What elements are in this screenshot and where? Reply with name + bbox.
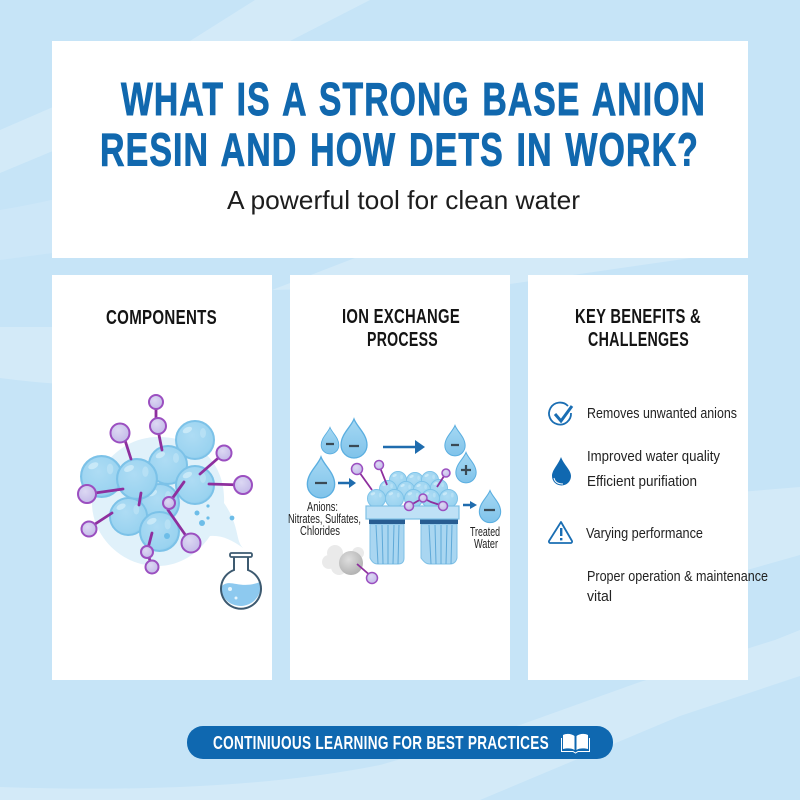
list item: vital: [587, 588, 612, 605]
list item: Proper operation & maintenance: [587, 568, 768, 585]
heading: benefits: KEY BENEFITS &: [575, 305, 701, 328]
icon: warning: [549, 522, 572, 543]
panel: key benefits and challenges: [528, 275, 768, 680]
heading: benefits: CHALLENGES: [588, 328, 689, 351]
panel: ion exchange process: [288, 275, 510, 680]
label: anions: Nitrates, Sulfates,: [288, 512, 361, 526]
molecule illustration: [78, 395, 252, 574]
list item: Efficient purifiation: [587, 473, 697, 490]
heading: ion exchange process: ION EXCHANGE: [342, 305, 460, 328]
list item: [587, 568, 768, 605]
label: treated water: Treated: [470, 525, 500, 539]
heading: ion exchange process: PROCESS: [367, 328, 438, 351]
label: treated water: Water: [474, 537, 498, 551]
label: anions: Chlorides: [300, 524, 340, 538]
filter with resin beads: [352, 460, 459, 564]
list item: Improved water quality: [587, 448, 720, 465]
label: treated water: [470, 525, 500, 551]
icon: drop: [552, 457, 571, 486]
icon: book: [562, 734, 590, 753]
arrows: [338, 440, 477, 509]
list item: Removes unwanted anions: [587, 405, 737, 422]
callout: continuous learning: CONTINIUOUS LEARNING FOR BEST PRACTICES: [213, 732, 549, 753]
subtitle: A powerful tool for clean water: [227, 185, 580, 215]
spent resin grey cluster: [322, 545, 378, 584]
panel: header: [52, 41, 748, 258]
icon: flask: [221, 553, 261, 609]
title: [100, 73, 706, 176]
list item: Varying performance: [586, 525, 703, 542]
label: anions: [288, 500, 361, 538]
heading: ion exchange process: [342, 305, 460, 351]
callout: continuous learning: [187, 726, 613, 759]
label: anions: Anions:: [307, 500, 338, 514]
icons: water drops: [307, 419, 501, 523]
heading: components: COMPONENTS: [106, 306, 217, 329]
heading: benefits: [575, 305, 701, 351]
icon: check: [549, 403, 572, 425]
panel: components: [52, 275, 272, 680]
